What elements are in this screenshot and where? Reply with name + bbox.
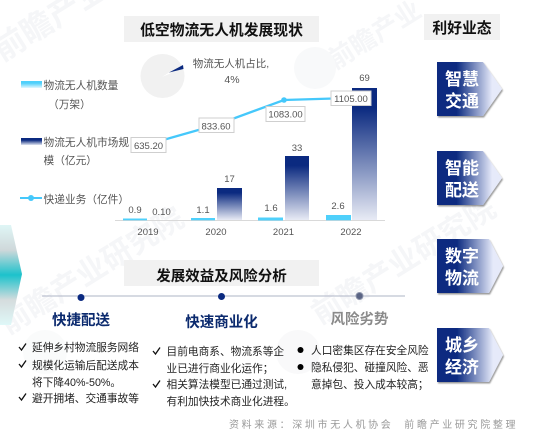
column: risks: 意掉包、投入成本较高； <box>311 378 429 391</box>
value label 635.20: 635.20 <box>134 141 163 152</box>
arrow: smart delivery: 智能 <box>445 158 479 178</box>
column: fast commercialization: 快速商业化 <box>185 313 258 331</box>
arrow: smart delivery <box>437 151 502 205</box>
column: risks <box>298 310 429 391</box>
legend: market size: 模（亿元） <box>44 154 97 167</box>
legend: market size: 物流无人机市场规 <box>44 136 129 149</box>
value label 1083.00 <box>266 106 305 122</box>
watermarks: 前瞻产业研究院 <box>0 202 190 341</box>
column: risks: 风险劣势 <box>330 310 389 328</box>
legend: drone count: 物流无人机数量 <box>44 79 119 92</box>
arrow: smart transport: 交通 <box>445 91 479 111</box>
value label 833.60: 833.60 <box>201 122 231 132</box>
bars 2020 <box>191 174 242 238</box>
bars 2022: 69 <box>359 73 370 84</box>
line chart: express business <box>131 91 371 152</box>
column: fast commercialization <box>153 313 295 408</box>
heading: favorable sectors: 利好业态 <box>432 19 492 37</box>
value label 1105.00: 1105.00 <box>334 94 368 105</box>
legend: drone count: （万架） <box>48 98 91 111</box>
arrow: smart transport: 智慧 <box>445 69 479 89</box>
column: fast delivery: 延伸乡村物流服务网络 <box>32 341 139 354</box>
bars 2020: 17 <box>224 174 235 185</box>
column: risks: 隐私侵犯、碰撞风险、恶 <box>311 361 429 374</box>
value label 1105.00 <box>331 91 371 106</box>
bars 2020: 2020 <box>205 227 227 238</box>
column: fast commercialization: 相关算法模型已通过测试, <box>166 378 287 391</box>
arrow: digital logistics: 数字 <box>445 246 479 266</box>
column: risks: 人口密集区存在安全风险 <box>311 344 429 357</box>
arrow: digital logistics: 物流 <box>445 269 479 288</box>
value label 833.60 <box>199 118 234 132</box>
arrow: smart transport <box>437 62 502 116</box>
bars 2021 <box>258 143 309 238</box>
bars 2021: 2021 <box>273 227 294 238</box>
heading: favorable sectors <box>424 14 500 40</box>
bars 2020: 1.1 <box>196 205 210 216</box>
pie chart: drone share 4%: 物流无人机占比, <box>193 57 269 70</box>
bars 2019: 0.10 <box>152 207 171 218</box>
arrow: urban-rural economy <box>437 328 503 382</box>
bars 2022: 2022 <box>340 227 362 238</box>
legend: market size <box>21 136 129 167</box>
pie chart: drone share 4%: 4% <box>224 74 240 86</box>
value label 635.20 <box>131 138 166 152</box>
bars 2021: 1.6 <box>264 203 278 214</box>
legend: express business: 快递业务（亿件） <box>44 193 129 206</box>
column: fast delivery <box>19 311 139 405</box>
bars 2019: 2019 <box>137 227 159 238</box>
column: fast delivery: 快捷配送 <box>52 311 110 329</box>
watermarks: 前瞻产业研究院 <box>306 192 502 331</box>
column: fast commercialization: 目前电商系、物流系等企 <box>166 345 284 358</box>
pie chart: drone share 4% <box>140 54 269 98</box>
column: fast delivery: 避开拥堵、交通事故等 <box>32 392 139 405</box>
bars 2019: 0.9 <box>128 205 142 216</box>
legend <box>20 79 129 206</box>
heading: benefits and risks <box>124 260 319 286</box>
column: fast commercialization: 业已进行商业化运作； <box>166 362 273 375</box>
arrow: digital logistics <box>437 239 503 293</box>
source note: 资料来源：深圳市无人机协会 前瞻产业研究院整理 <box>229 418 518 431</box>
heading: benefits and risks: 发展效益及风险分析 <box>156 267 287 285</box>
legend: drone count <box>21 79 119 111</box>
column: fast commercialization: 有利加快技术商业化进程。 <box>166 395 295 408</box>
column: fast delivery: 将下降40%-50%。 <box>32 376 121 389</box>
title: drone status <box>124 16 319 42</box>
timeline <box>42 292 405 301</box>
bar chart <box>115 73 385 238</box>
arrow: smart delivery: 配送 <box>445 181 479 200</box>
arrow: urban-rural economy: 经济 <box>445 357 479 377</box>
bars 2022: 2.6 <box>331 201 345 212</box>
arrow: urban-rural economy: 城乡 <box>445 335 479 355</box>
value label 1083.00: 1083.00 <box>268 110 303 120</box>
bars 2021: 33 <box>292 143 302 154</box>
bars 2022 <box>326 73 377 238</box>
column: fast delivery: 规模化运输后配送成本 <box>32 359 139 372</box>
bars 2019 <box>123 205 171 238</box>
left chevron decoration <box>0 225 22 325</box>
title: drone status: 低空物流无人机发展现状 <box>140 21 303 39</box>
